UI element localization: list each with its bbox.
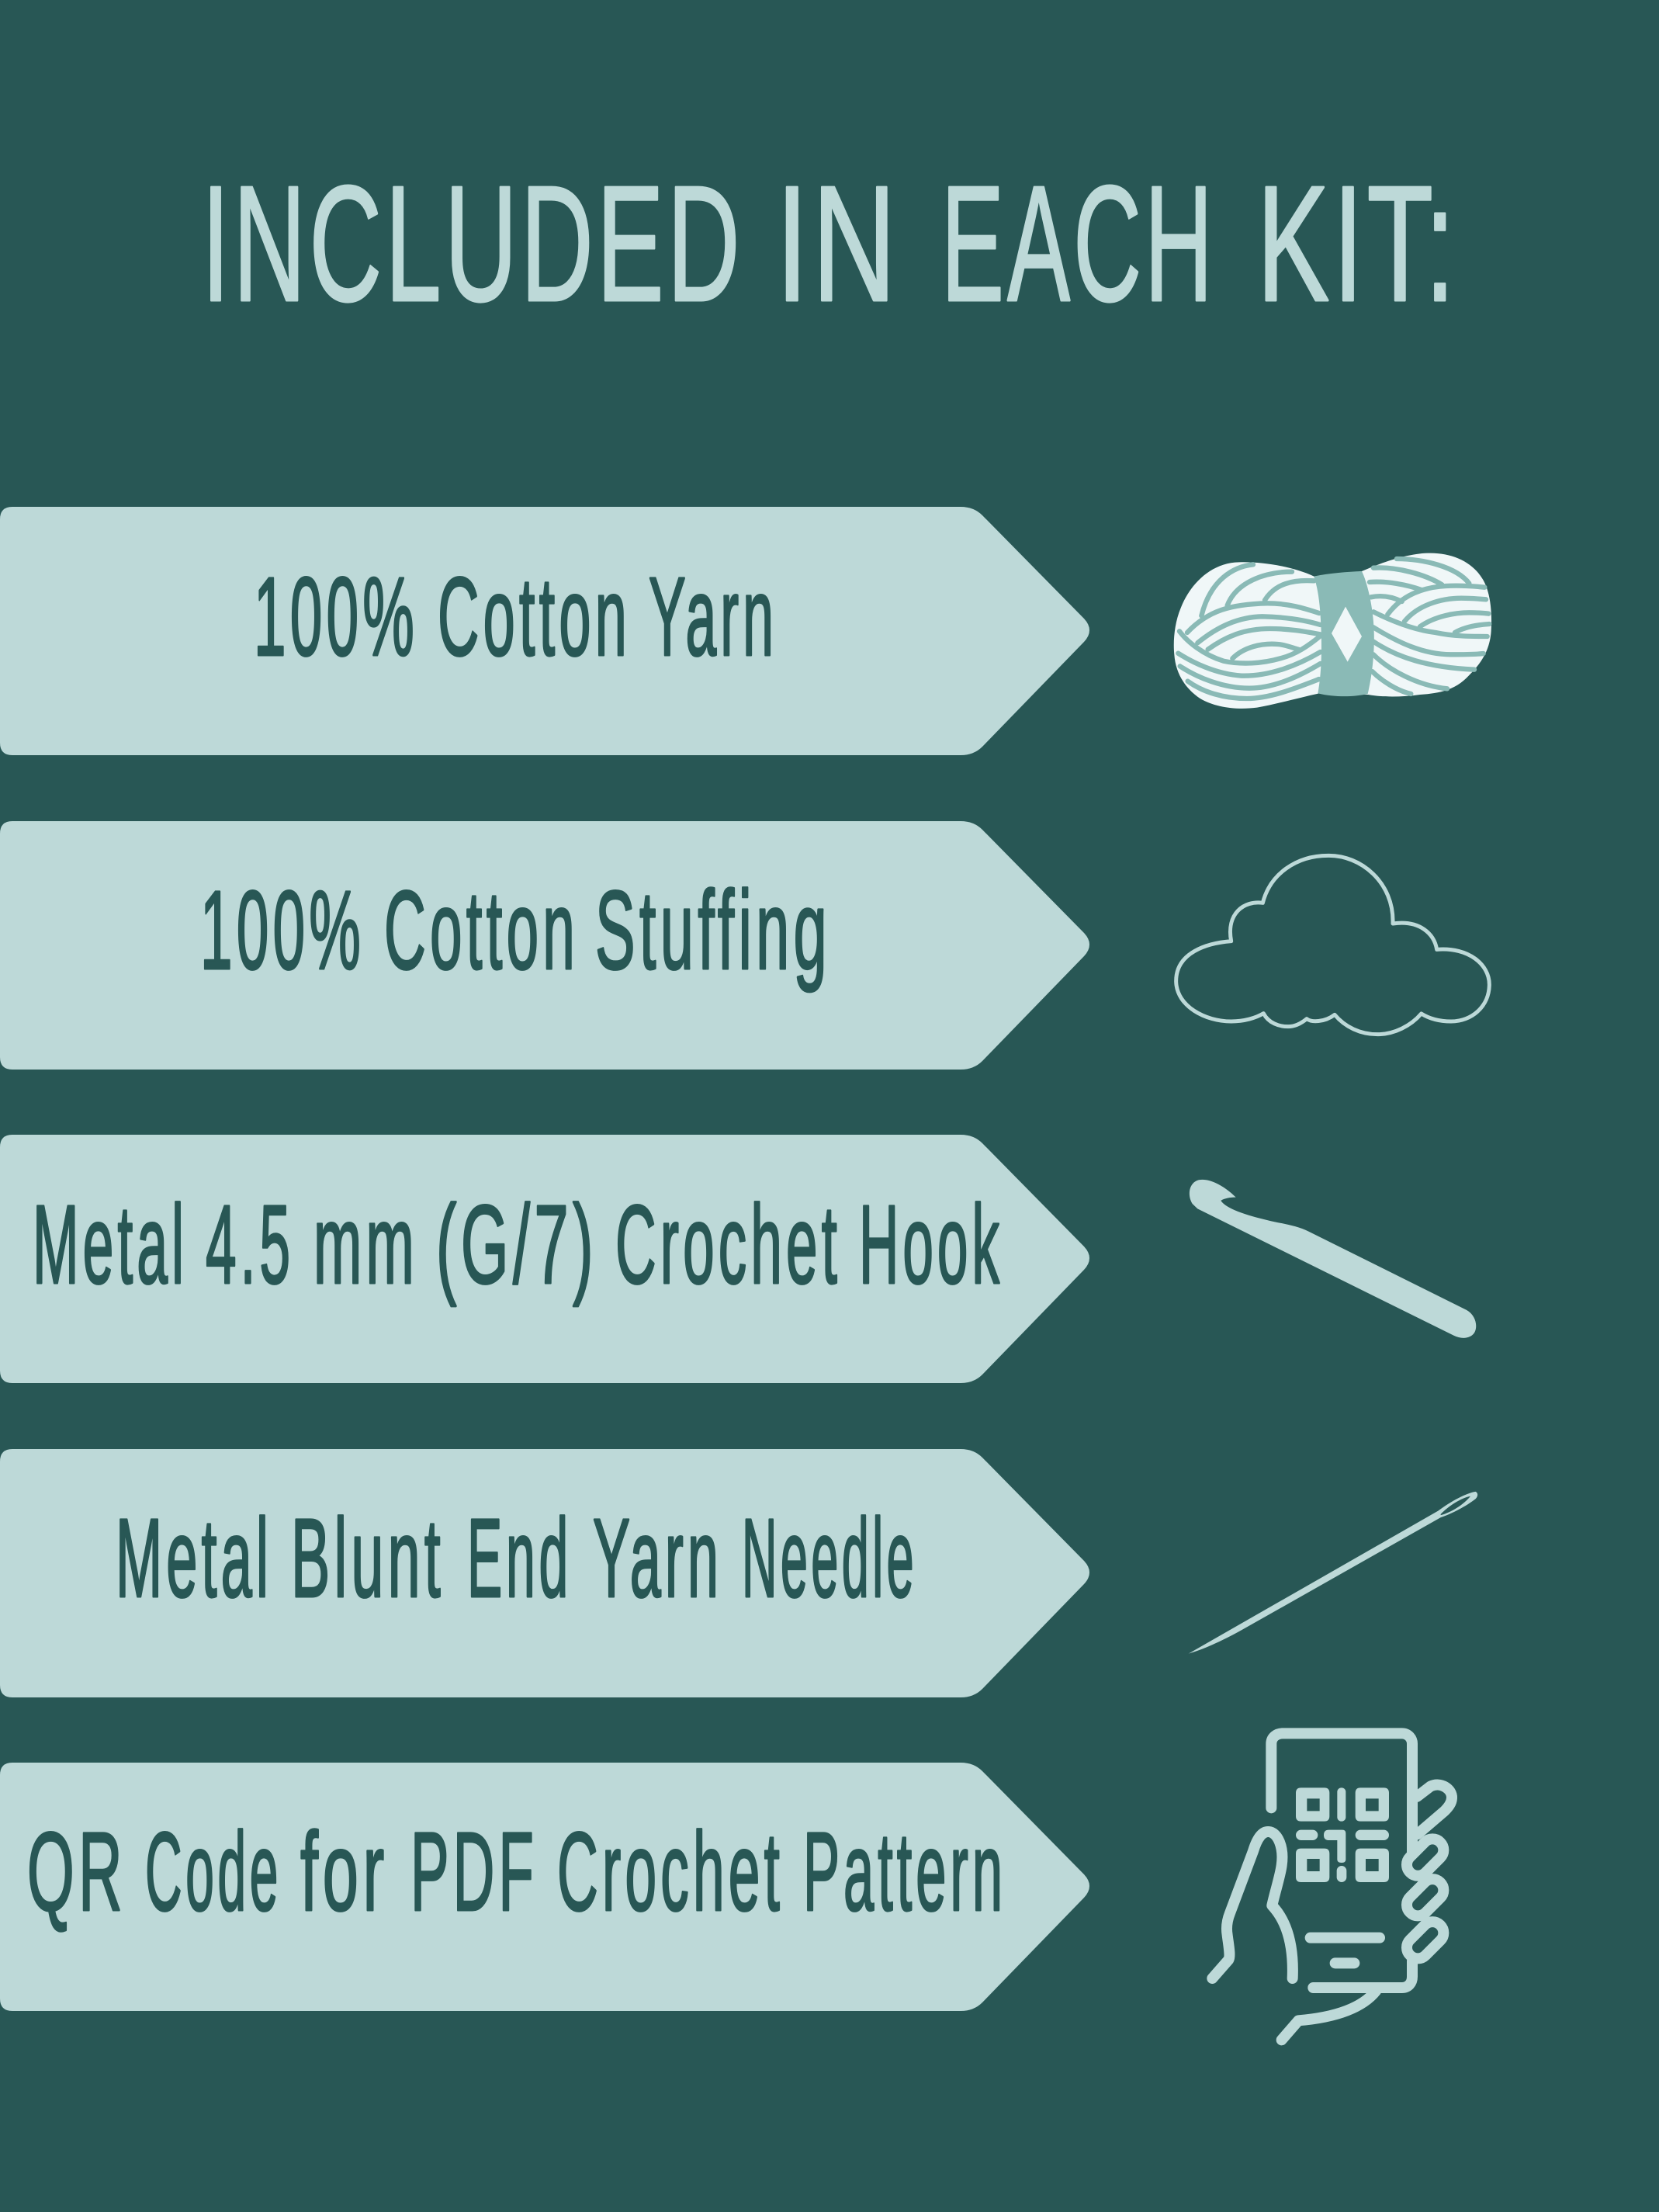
label: Metal 4.5 mm (G/7) Crochet Hook: Crochet [615, 1182, 841, 1307]
label: Metal Blunt End Yarn Needle: Yarn [593, 1496, 722, 1621]
panel: yarn needle arrow [0, 1449, 1089, 1697]
label: Metal 4.5 mm (G/7) Crochet Hook: (G/7) [436, 1182, 597, 1307]
label: Metal 4.5 mm (G/7) Crochet Hook [33, 1182, 1003, 1307]
label: 100% Cotton Stuffing: 100% [200, 868, 365, 993]
label: 100% Cotton Yarn: 100% [254, 554, 418, 679]
title: EACH [941, 151, 1216, 335]
panel: QR code arrow: Pattern [803, 1809, 1006, 1934]
label: 100% Cotton Stuffing: Stuffing [595, 868, 831, 993]
label: 100% Cotton Stuffing [200, 868, 831, 993]
label: Metal 4.5 mm (G/7) Crochet Hook: Metal [33, 1182, 188, 1307]
panel: 100% cotton stuffing arrow [0, 821, 1089, 1070]
label: Metal Blunt End Yarn Needle: Blunt [291, 1496, 445, 1621]
label: Metal 4.5 mm (G/7) Crochet Hook: mm [313, 1182, 418, 1307]
title: IN [776, 151, 900, 335]
label: QR Code for PDF Crochet Pattern: QR [27, 1809, 126, 1934]
title: INCLUDED [202, 151, 743, 335]
label: Metal Blunt End Yarn Needle: Metal [116, 1496, 272, 1621]
label: Metal 4.5 mm (G/7) Crochet Hook: 4.5 [206, 1182, 294, 1307]
label: 100% Cotton Yarn: Cotton [438, 554, 631, 679]
panel: QR code arrow [0, 1763, 1089, 2011]
label: QR Code for PDF Crochet Pattern: Crochet [557, 1809, 784, 1934]
label: Metal Blunt End Yarn Needle [116, 1496, 917, 1621]
label: 100% Cotton Stuffing: Cotton [384, 868, 579, 993]
icon: crochet hook [1190, 1180, 1476, 1338]
panel: 100% cotton yarn arrow [0, 507, 1089, 755]
panel: crochet hook arrow: Hook [859, 1182, 1003, 1307]
label: Metal Blunt End Yarn Needle: End [467, 1496, 572, 1621]
panel: 100% cotton yarn arrow: Yarn [649, 554, 778, 679]
title: KIT: [1257, 151, 1459, 335]
label: QR Code for PDF Crochet Pattern: PDF [410, 1809, 538, 1934]
icon: hand holding phone with QR code [1212, 1733, 1452, 2040]
panel: crochet hook arrow [0, 1135, 1089, 1383]
label: QR Code for PDF Crochet Pattern: Code [145, 1809, 282, 1934]
icon: cloud stuffing [1176, 855, 1489, 1035]
label: 100% Cotton Yarn [254, 554, 778, 679]
label: QR Code for PDF Crochet Pattern [27, 1809, 1006, 1934]
panel: yarn needle arrow: Needle [742, 1496, 917, 1621]
icon: yarn needle [1189, 1492, 1477, 1654]
icon: yarn skein [1174, 553, 1491, 709]
label: QR Code for PDF Crochet Pattern: for [300, 1809, 389, 1934]
